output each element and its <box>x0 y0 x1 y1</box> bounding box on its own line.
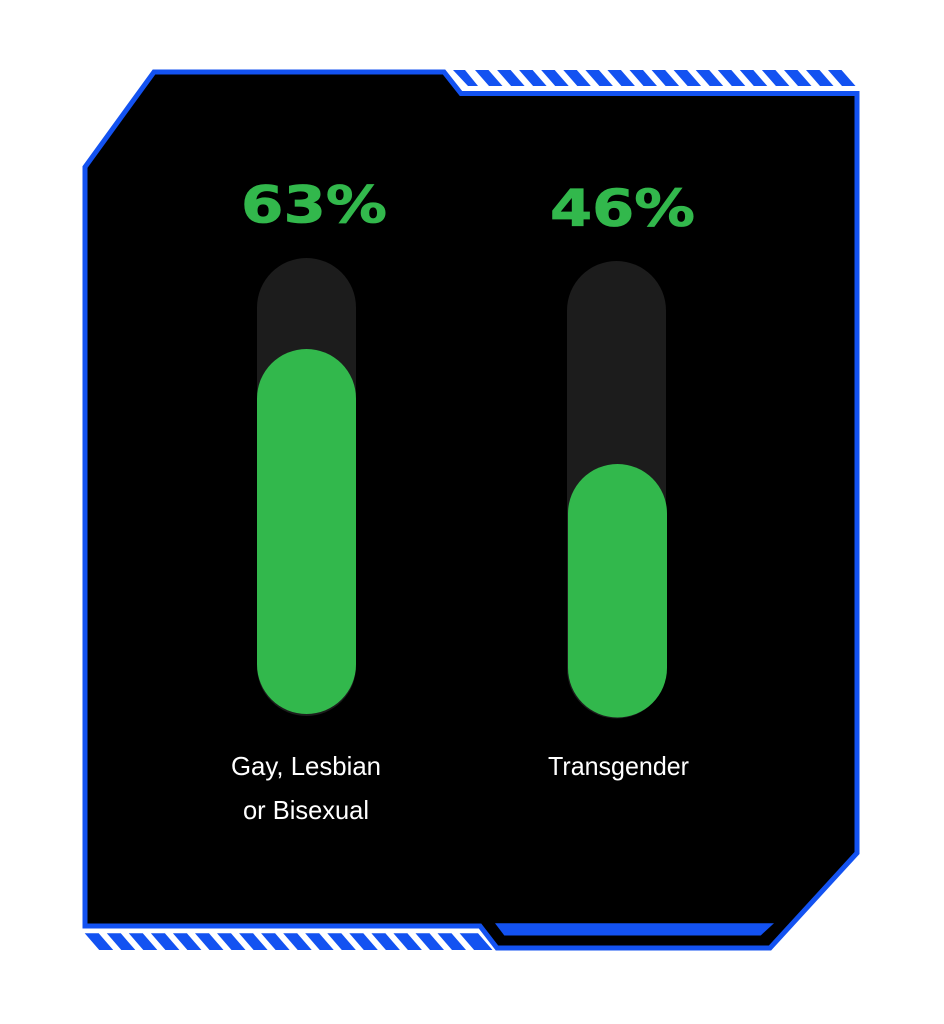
value: 63%: 63% <box>241 176 387 235</box>
bar fill <box>257 349 356 714</box>
label <box>231 751 381 825</box>
top hazard stripes <box>453 70 856 86</box>
bar fill <box>568 464 667 718</box>
bottom hazard stripes <box>85 933 492 950</box>
bar track <box>567 261 666 718</box>
bar track <box>257 258 356 716</box>
bottom blue accent bar <box>495 923 774 936</box>
label: Gay, Lesbian <box>231 751 381 781</box>
panel: black frame with blue border <box>85 72 857 948</box>
label: Transgender <box>548 751 689 781</box>
column: Transgender <box>548 180 695 781</box>
label: or Bisexual <box>243 795 369 825</box>
value: 46%: 46% <box>550 180 695 239</box>
column: Gay, Lesbian or Bisexual <box>231 176 387 825</box>
